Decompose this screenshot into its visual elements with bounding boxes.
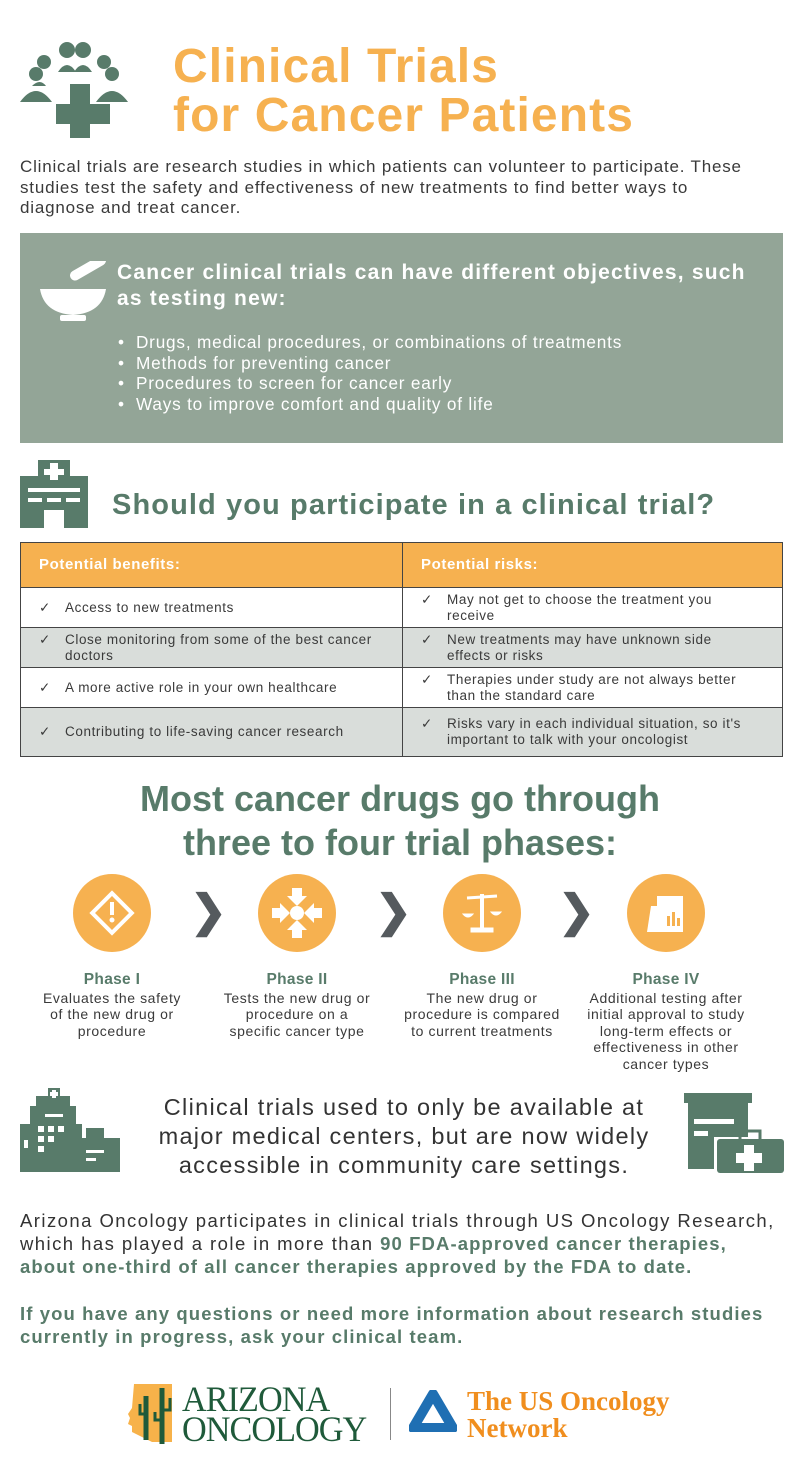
phase II text — [224, 971, 370, 1039]
icon: hospital — [20, 460, 88, 528]
heading: trial phases — [140, 778, 660, 863]
logo: US Oncology Network: The US Oncology — [467, 1386, 670, 1416]
intro text: studies test the safety and effectiveness of new treatments to find better ways to — [20, 178, 688, 196]
intro text: Clinical trials are research studies in which patients can volunteer to participate. These — [20, 157, 742, 176]
panel: objectives — [20, 233, 783, 443]
panel heading: Cancer clinical trials can have different objectives, such — [117, 261, 746, 284]
phase IV text — [587, 971, 745, 1072]
phase IV text: initial approval to study — [587, 1006, 745, 1022]
phase icons row — [73, 874, 705, 952]
arrow: ❯ — [558, 887, 595, 936]
phase III text: Phase III — [449, 971, 515, 988]
phase II text: specific cancer type — [230, 1022, 364, 1038]
phase II text: Phase II — [266, 971, 328, 988]
table: benefits and risks: important to talk with your oncologist — [447, 732, 688, 747]
table: benefits and risks: ✓ — [421, 632, 433, 646]
phase IV text: cancer types — [623, 1056, 709, 1072]
phase IV text: long-term effects or — [600, 1022, 732, 1038]
logo: Arizona Oncology: ARIZONA — [182, 1379, 329, 1419]
phase III text: procedure is compared — [404, 1006, 560, 1022]
panel heading: as testing new: — [117, 287, 287, 310]
phase I text: procedure — [78, 1022, 146, 1038]
icon: phase IV report — [627, 874, 705, 952]
table: benefits and risks: Contributing to life-saving cancer research — [65, 724, 344, 739]
phase III text — [404, 971, 560, 1038]
text: Arizona Oncology paragraph: about one-third of all cancer therapies approved by the FDA to date. — [20, 1256, 692, 1277]
text: questions callout: If you have any questions or need more information about research studies — [20, 1303, 763, 1324]
title: Clinical Trials — [173, 40, 499, 93]
phase III text: The new drug or — [427, 990, 537, 1006]
arrow: ❯ — [375, 887, 412, 936]
icon: phase I warning — [73, 874, 151, 952]
panel heading — [117, 261, 746, 310]
bullet list: • Methods for preventing cancer — [118, 352, 391, 372]
icon: phase II arrows — [258, 874, 336, 952]
phase I text: Evaluates the safety — [43, 990, 181, 1006]
bullet list: • Drugs, medical procedures, or combinations of treatments — [118, 332, 622, 352]
text: questions callout: currently in progress, ask your clinical team. — [20, 1326, 463, 1347]
intro text — [20, 157, 742, 217]
table: benefits and risks: Potential benefits: — [39, 556, 180, 573]
table: benefits and risks: May not get to choose the treatment you — [447, 592, 712, 606]
bullet list — [118, 332, 622, 414]
text: community care: accessible in community care settings. — [179, 1152, 629, 1178]
table: benefits and risks: Therapies under study are not always better — [447, 672, 736, 686]
text: community care: major medical centers, but are now widely — [159, 1123, 649, 1149]
table: benefits and risks: ✓ — [39, 600, 51, 614]
text: community care: Clinical trials used to only be available at — [164, 1094, 644, 1120]
logo: Arizona Oncology: ONCOLOGY — [182, 1409, 366, 1449]
intro text: diagnose and treat cancer. — [20, 198, 241, 217]
text: questions callout — [20, 1303, 763, 1347]
icon: phase III scales — [443, 874, 521, 952]
logo: Arizona Oncology — [128, 1379, 366, 1449]
table: benefits and risks: Access to new treatments — [65, 600, 234, 614]
heading: should you participate: Should you participate in a clinical trial? — [112, 489, 715, 521]
text: Arizona Oncology paragraph: which has played a role in more than 90 FDA-approved cancer therapies, — [20, 1233, 727, 1254]
table: benefits and risks: effects or risks — [447, 648, 543, 662]
table: benefits and risks: ✓ — [39, 632, 51, 646]
phase I text — [43, 971, 181, 1039]
table: benefits and risks: ✓ — [421, 672, 433, 686]
table: benefits and risks: ✓ — [39, 680, 51, 694]
icon: medical buildings — [20, 1088, 120, 1172]
table: benefits and risks: ✓ — [421, 592, 433, 606]
phase IV text: Phase IV — [632, 971, 700, 988]
table: benefits and risks: A more active role in your own healthcare — [65, 680, 337, 694]
icon: clinic with medical kit — [684, 1093, 784, 1173]
logos — [128, 1379, 670, 1449]
phase III text: to current treatments — [411, 1022, 553, 1038]
bullet list: • Procedures to screen for cancer early — [118, 373, 452, 393]
phase II text: procedure on a — [246, 1006, 348, 1022]
table: benefits and risks: Risks vary in each individual situation, so it's — [447, 716, 741, 731]
text: community care — [159, 1094, 649, 1178]
heading: trial phases: Most cancer drugs go through — [140, 778, 660, 819]
table: benefits and risks — [20, 542, 783, 757]
table: benefits and risks: doctors — [65, 648, 113, 662]
title — [173, 40, 634, 142]
bullet list: • Ways to improve comfort and quality of life — [118, 394, 494, 414]
phase II text: Tests the new drug or — [224, 990, 370, 1006]
table: benefits and risks: Close monitoring from some of the best cancer — [65, 632, 372, 646]
phase IV text: Additional testing after — [590, 990, 742, 1006]
table: benefits and risks: ✓ — [39, 724, 51, 739]
text: Arizona Oncology paragraph — [20, 1210, 775, 1277]
table: benefits and risks: than the standard care — [447, 688, 595, 702]
logo: US Oncology Network: Network — [467, 1413, 567, 1443]
icon: mortar and pestle — [40, 261, 106, 321]
table: benefits and risks: receive — [447, 608, 495, 622]
icon: people with cross — [20, 42, 128, 138]
title: for Cancer Patients — [173, 89, 634, 142]
phase I text: Phase I — [84, 971, 140, 988]
arrow: ❯ — [190, 887, 227, 936]
table: benefits and risks: Potential risks: — [421, 556, 538, 573]
heading: trial phases: three to four trial phases: — [183, 822, 617, 863]
logo: US Oncology Network — [409, 1386, 670, 1443]
table: benefits and risks: New treatments may have unknown side — [447, 632, 712, 646]
phase I text: of the new drug or — [50, 1006, 174, 1022]
phase IV text: effectiveness in other — [593, 1039, 739, 1055]
text: Arizona Oncology paragraph: Arizona Oncology participates in clinical trials through US Oncology Research, — [20, 1210, 775, 1231]
table: benefits and risks: ✓ — [421, 716, 433, 731]
